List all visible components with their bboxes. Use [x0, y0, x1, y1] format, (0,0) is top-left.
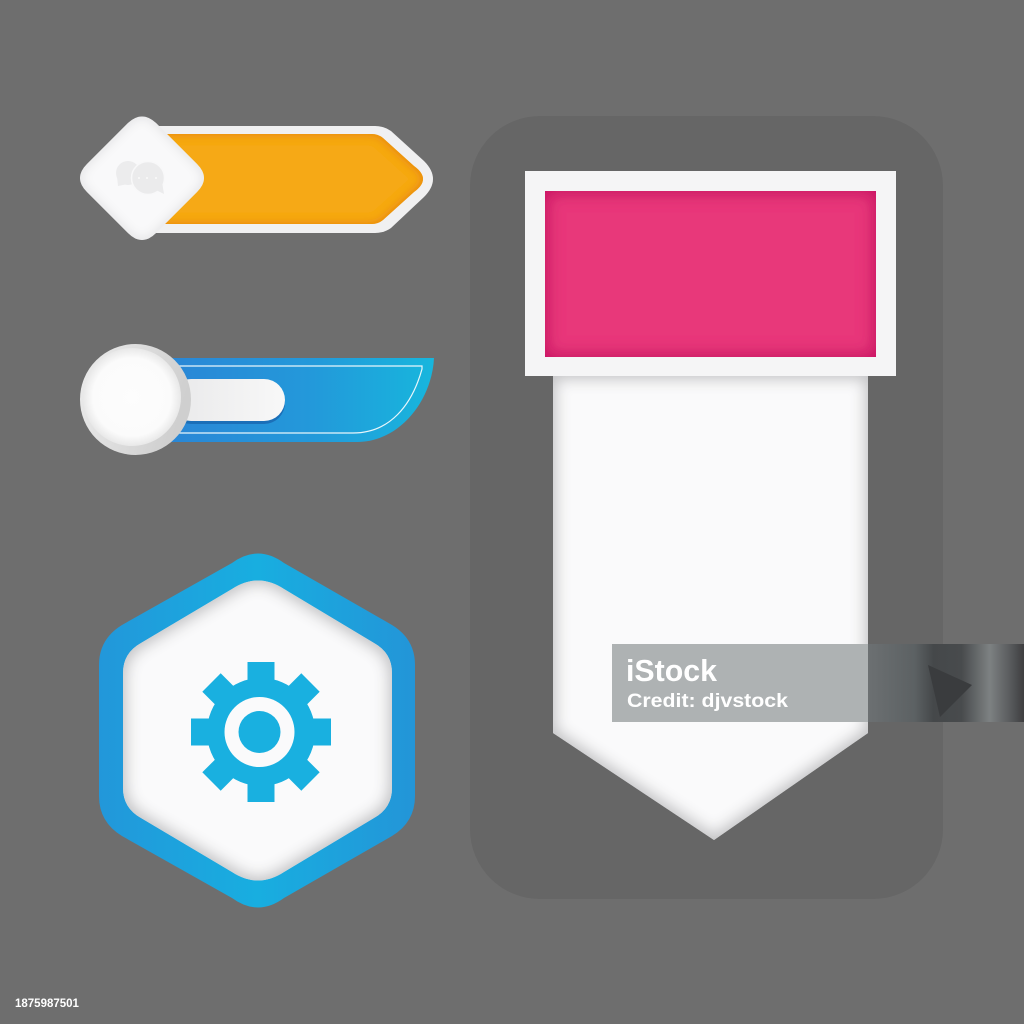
hexagon white center	[123, 580, 392, 880]
panel: dark rounded backdrop	[470, 116, 943, 899]
orange banner frame	[150, 126, 433, 233]
image id: 1875987501	[15, 998, 80, 1010]
pink header frame	[525, 171, 896, 376]
white pill	[170, 379, 285, 421]
panel: pink header ribbon	[525, 171, 896, 840]
watermark light section	[612, 644, 868, 722]
watermark dark section	[868, 644, 1024, 722]
icon: watermark play triangle	[928, 665, 972, 717]
icon: gear	[191, 662, 331, 802]
pink header fill	[545, 191, 876, 357]
hexagon blue border	[99, 554, 415, 908]
white pill slot	[170, 381, 285, 424]
orange banner fill	[160, 134, 423, 224]
icon: chat bubbles	[116, 161, 164, 194]
round knob	[80, 344, 191, 455]
banner: blue blade label	[80, 344, 434, 455]
diamond badge	[80, 116, 204, 240]
thin white inline outline	[170, 366, 422, 433]
hexagon badge	[99, 554, 415, 908]
white ribbon body	[553, 376, 868, 840]
blue blade shape	[165, 358, 434, 442]
watermark credit: Credit: djvstock	[627, 690, 788, 712]
banner: orange arrow label	[80, 116, 433, 240]
watermark band	[612, 644, 1024, 722]
watermark logo: iStock	[626, 653, 718, 688]
